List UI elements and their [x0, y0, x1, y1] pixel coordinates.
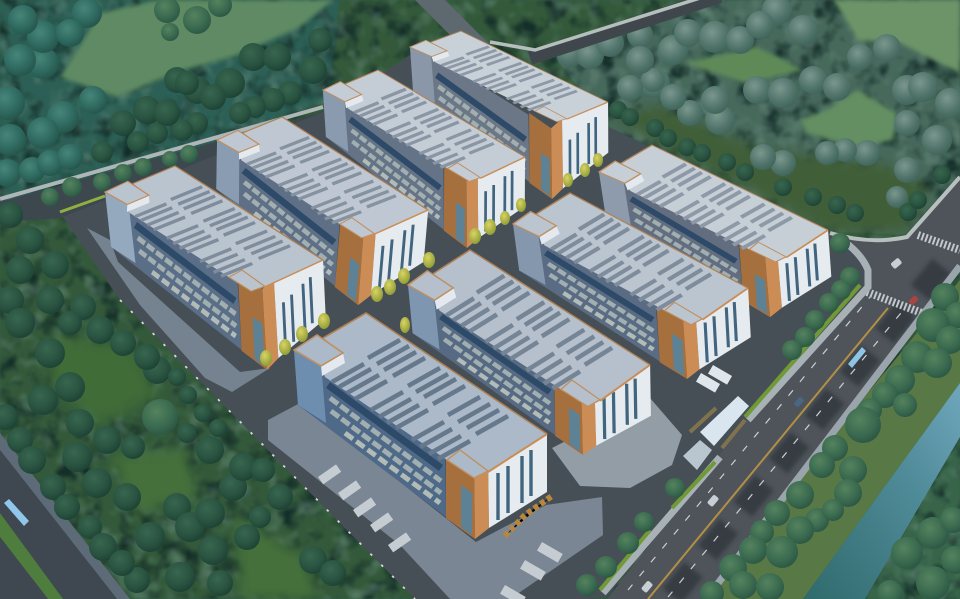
meadow: lower left patch two	[110, 450, 200, 515]
forest trees lower left	[0, 202, 346, 596]
back road curb	[490, 0, 700, 50]
road top centre	[415, 0, 490, 50]
teal trees top left	[0, 0, 107, 187]
grass under right forest	[610, 105, 930, 232]
road shadows	[672, 262, 945, 596]
dark treeline above road	[91, 28, 332, 163]
building: left row third	[202, 114, 438, 309]
riverside trees	[700, 283, 960, 599]
bottom left median	[0, 513, 63, 599]
middle plaza	[552, 398, 682, 488]
hazy trees right	[556, 0, 960, 208]
far bank forest	[865, 437, 960, 599]
bus on main road	[848, 347, 866, 368]
yellow box junction	[690, 408, 745, 448]
building: back right	[592, 144, 837, 324]
building: back left	[407, 28, 612, 212]
container trailer	[700, 396, 749, 446]
hedge along street	[600, 285, 860, 590]
crosswalk	[867, 235, 960, 313]
road behind the left buildings	[0, 112, 330, 222]
forest: top left	[0, 0, 340, 205]
building: left row front	[88, 164, 339, 382]
site fence	[120, 300, 415, 599]
cars on road	[641, 257, 919, 593]
trees along top left road	[41, 145, 198, 206]
trees on top left meadow	[154, 0, 232, 41]
forest: right side	[545, 0, 960, 235]
meadow: top right	[833, 0, 960, 73]
bottom left sidewalk	[0, 433, 130, 599]
site ground	[63, 40, 868, 599]
bottom left lower road	[0, 537, 48, 599]
meadow: lower left patch one	[45, 335, 160, 425]
lighter tree left	[142, 399, 178, 435]
meadow: upper centre right	[683, 47, 803, 83]
building: front	[294, 313, 547, 539]
delivery trucks at front	[318, 464, 563, 599]
white trucks near building	[696, 365, 732, 393]
road curb top left	[0, 107, 323, 199]
street trees	[576, 233, 860, 596]
building: left row second	[322, 66, 527, 251]
right sidewalk	[706, 266, 960, 599]
river bank grass	[700, 280, 960, 599]
bottom left bus	[4, 499, 29, 526]
gatehouse	[683, 440, 712, 470]
curb to side road	[830, 177, 960, 240]
dark trees row behind back right building	[609, 101, 951, 222]
meadow: top left	[60, 0, 333, 97]
river	[803, 383, 960, 599]
meadow: right clearing	[800, 90, 897, 147]
left plaza	[87, 228, 270, 392]
building: right row third	[507, 190, 755, 384]
bottom left road	[0, 450, 117, 599]
lane markings	[628, 297, 905, 597]
meadow: lower left patch three	[235, 515, 320, 599]
small yellow trees	[260, 153, 603, 366]
forklifts and cargo	[505, 496, 552, 536]
left road curb	[603, 243, 868, 593]
main road	[607, 180, 960, 599]
back road top	[530, 0, 720, 58]
hedge near left gate	[60, 196, 105, 212]
yellow centre line	[648, 308, 888, 599]
front plaza	[268, 403, 603, 599]
building: right row second	[404, 250, 655, 457]
